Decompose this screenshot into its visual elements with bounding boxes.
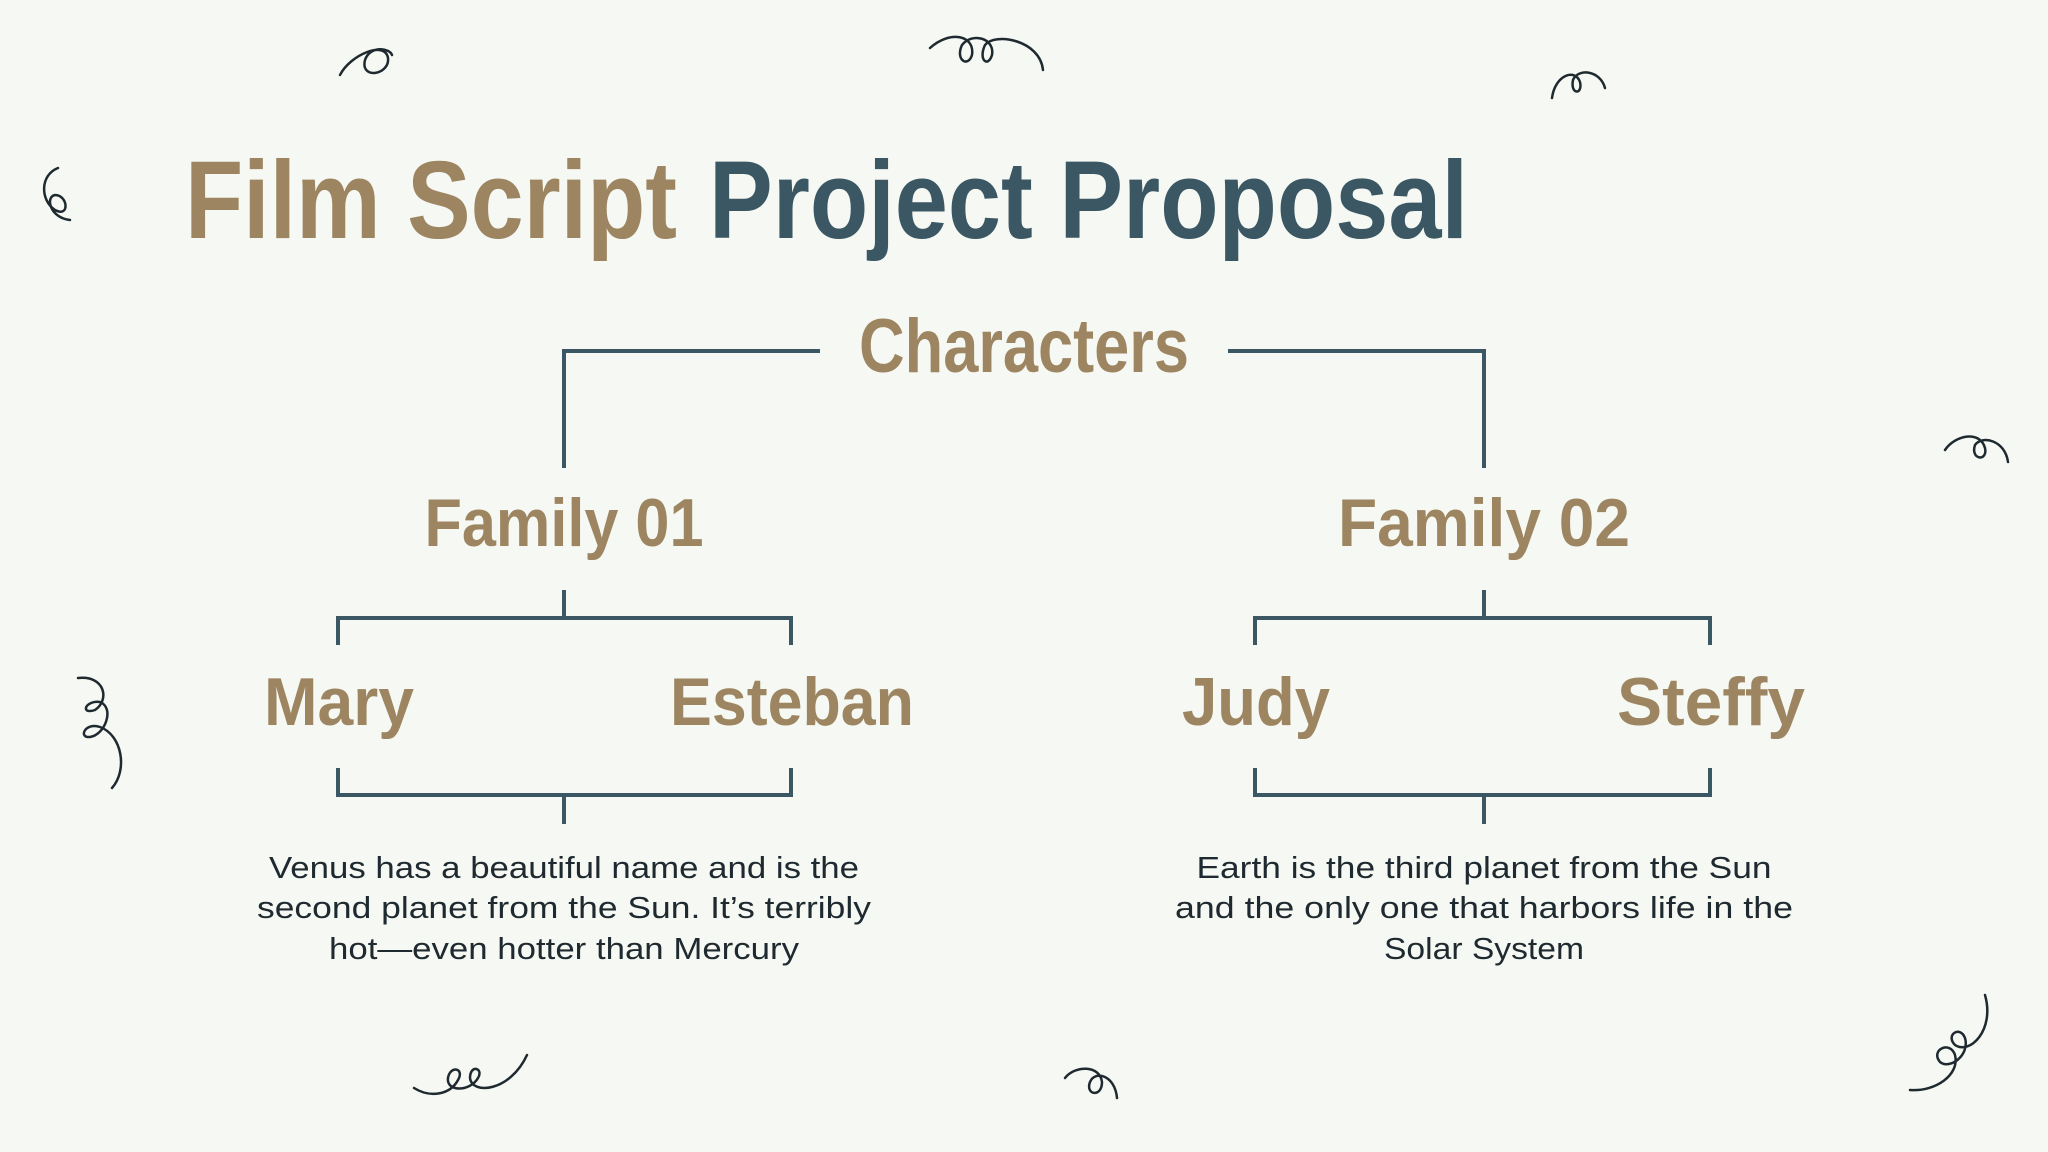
name: Steffy: Steffy xyxy=(1617,664,1805,740)
connector: lower bracket 01 xyxy=(338,768,791,824)
text block: family 01 description: second planet from the Sun. It’s terribly xyxy=(257,890,872,925)
name: Judy: Judy xyxy=(1182,664,1330,740)
text block: family 02 description: Earth is the third planet from the Sun xyxy=(1196,850,1772,885)
text block: family 01 description: hot—even hotter than Mercury xyxy=(329,931,800,966)
name: Esteban: Esteban xyxy=(670,664,914,740)
name: Mary: Mary xyxy=(264,664,414,740)
text block: family 02 description: and the only one that harbors life in the xyxy=(1175,890,1793,925)
connector: family 02 bracket xyxy=(1255,590,1710,645)
title xyxy=(185,139,1468,262)
text block: family 02 description xyxy=(1175,850,1793,966)
heading: Family 02: Family 02 xyxy=(1338,485,1630,561)
connector: lower bracket 02 xyxy=(1255,768,1710,824)
text block: family 02 description: Solar System xyxy=(1384,931,1584,966)
heading: Family 01: Family 01 xyxy=(424,485,704,561)
text block: family 01 description xyxy=(257,850,872,966)
connector: family 01 bracket xyxy=(338,590,791,645)
connector: characters to families xyxy=(564,351,1484,468)
text block: family 01 description: Venus has a beautiful name and is the xyxy=(269,850,859,885)
panel: family 02 xyxy=(1175,485,1805,966)
panel: family 01 xyxy=(257,485,914,966)
title: Project Proposal xyxy=(709,139,1468,262)
heading: Characters: Characters xyxy=(859,304,1189,389)
title: Film Script xyxy=(185,139,677,262)
